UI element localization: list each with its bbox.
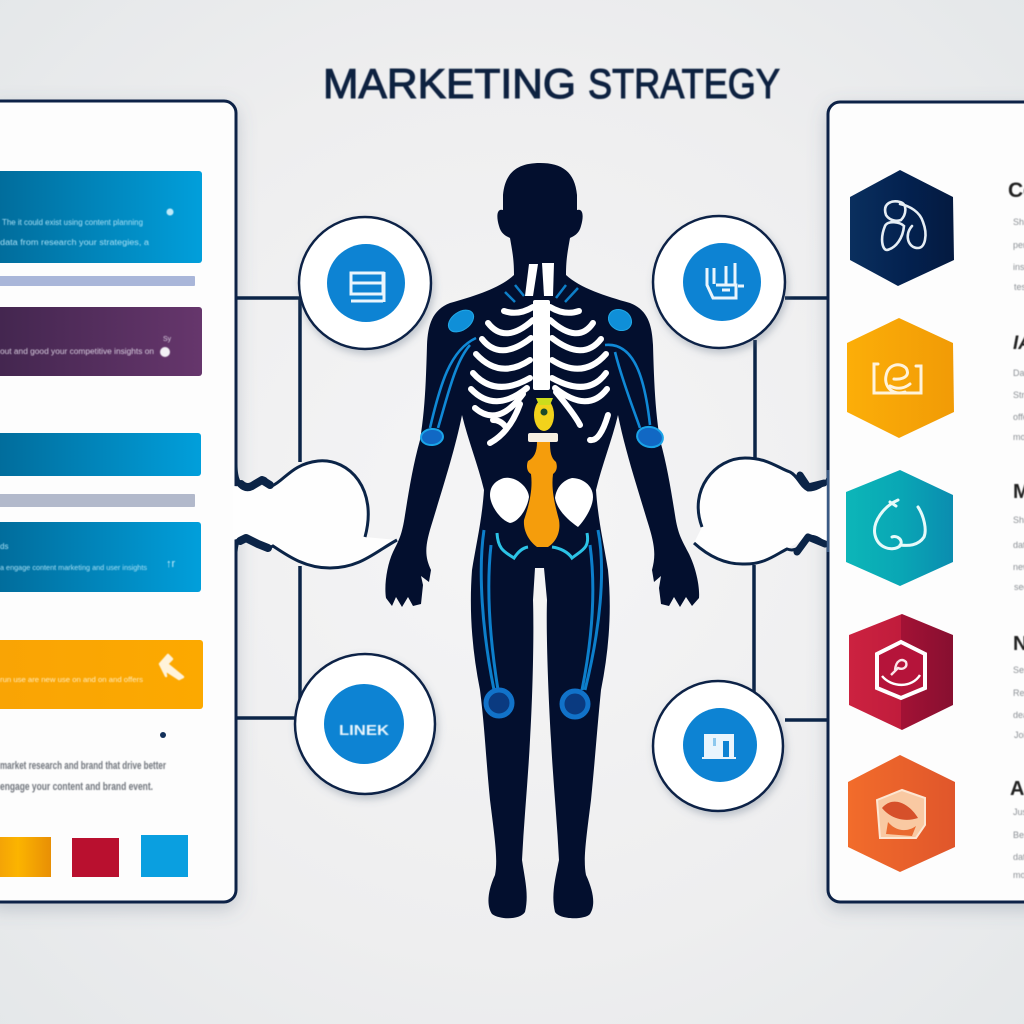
card: orange [0, 640, 203, 709]
card: purple: Sy [163, 336, 172, 343]
circle node: top left [299, 217, 431, 349]
swatch: red [72, 838, 119, 877]
pelvic blobs [490, 478, 593, 527]
icon: camera [874, 364, 921, 393]
left bulb connector [233, 461, 397, 568]
swatch: blue [141, 835, 188, 877]
icon: box [877, 790, 925, 838]
item text 1 [1008, 179, 1024, 292]
item text 3 [1013, 481, 1024, 592]
card: blue 1: The it could exist using content planning [2, 218, 143, 227]
card: purple [0, 307, 202, 376]
ribs [471, 307, 608, 443]
hexagon: navy [850, 170, 954, 286]
bar: lavender 2 [0, 494, 195, 507]
text block: engage your content and brand event. [0, 781, 153, 793]
icon: swirl [875, 500, 925, 549]
item text 4 [1013, 633, 1024, 740]
orange spine [524, 442, 559, 547]
panel: right [828, 102, 1024, 902]
knee joints [486, 690, 588, 717]
card: blue 3: ds [0, 542, 8, 551]
yellow organ [534, 398, 554, 431]
pelvic arcs [497, 533, 588, 558]
title: MARKETING [323, 60, 576, 107]
circle node: bottom right [653, 681, 783, 811]
item text 2 [1013, 333, 1024, 442]
hexagon: orange-red [848, 755, 955, 872]
icon: knot [882, 201, 925, 250]
icon: book [702, 734, 736, 759]
shoulder joints [444, 305, 635, 336]
item text 5 [1010, 778, 1024, 880]
sternum [533, 300, 550, 390]
hexagon: red [849, 614, 953, 730]
connectors: right [694, 298, 828, 720]
icon: list [351, 272, 384, 302]
hexagon: teal [846, 470, 953, 586]
circle node: bottom left [295, 654, 435, 794]
icon label: LINEK [339, 722, 389, 739]
leg lines [481, 530, 602, 690]
dot [160, 732, 166, 738]
silhouette [385, 163, 699, 918]
elbow joints [420, 425, 665, 449]
neck accents [505, 285, 578, 302]
panel: left [0, 101, 236, 902]
circle node: top right [653, 216, 785, 348]
hexagon: orange [847, 318, 954, 438]
card: orange: run use are new use on and on and offers [0, 675, 143, 684]
right bulb connector [694, 458, 828, 564]
icon: hand [707, 263, 744, 298]
neck bones [525, 263, 554, 296]
card: blue 1 [0, 171, 202, 263]
bar: lavender 1 [0, 276, 195, 286]
text block [0, 760, 167, 793]
icon: shield [877, 642, 925, 698]
card: blue 3: ↑r [166, 558, 176, 570]
arm lines [430, 338, 650, 428]
card: blue 1: data from research your strategies, a [0, 238, 150, 247]
card: blue 2 [0, 433, 201, 476]
card: blue 3: a engage content marketing and user insights [0, 563, 147, 572]
title [323, 60, 780, 107]
text block: market research and brand that drive better [0, 760, 167, 772]
human figure [385, 163, 699, 918]
card: blue 3 [0, 522, 201, 592]
white cap [528, 433, 558, 442]
swatch: orange [0, 837, 51, 877]
title: STRATEGY [588, 60, 780, 107]
card: purple: out and good your competitive insights on [0, 347, 154, 356]
connectors: left [233, 298, 397, 720]
